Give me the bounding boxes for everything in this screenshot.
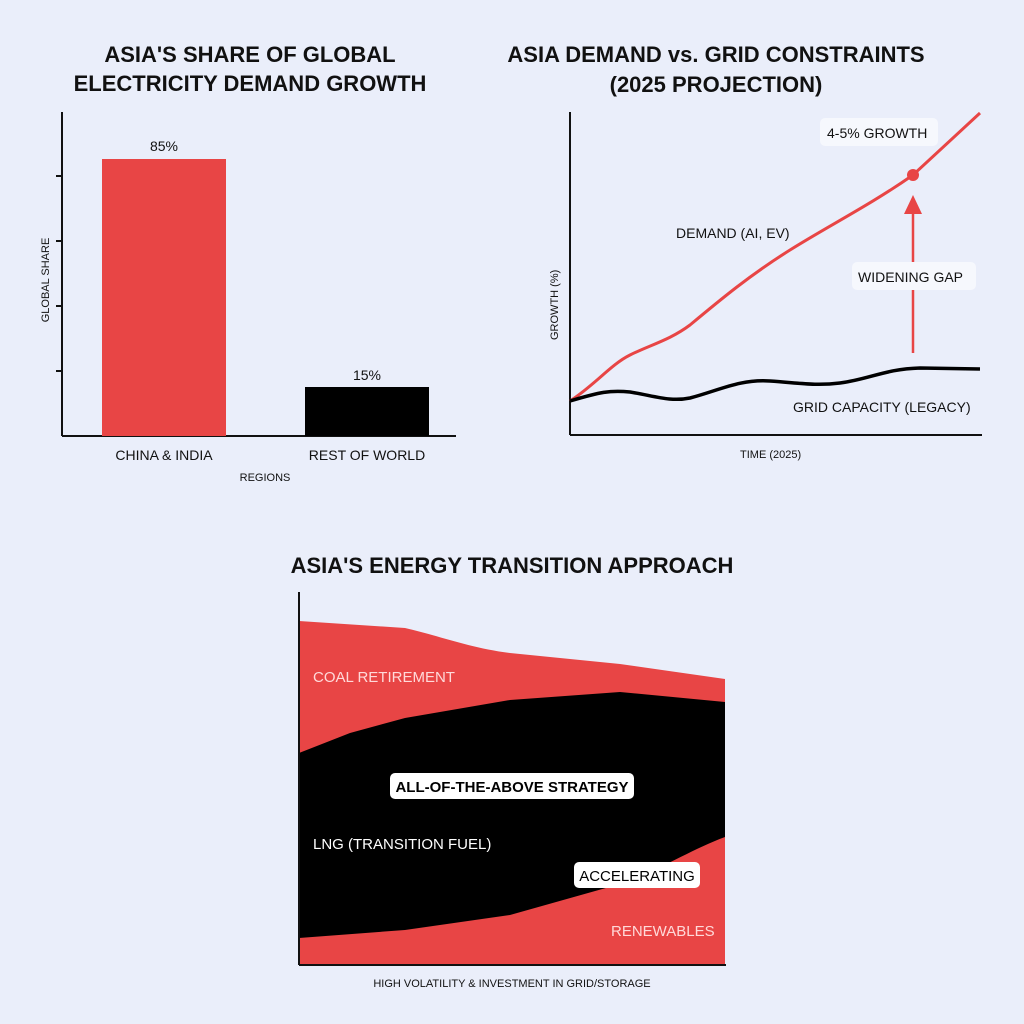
title: bottom chart: ASIA'S ENERGY TRANSITION APPROACH (291, 553, 733, 578)
line chart: demand vs grid: DEMAND (AI, EV) (676, 225, 790, 241)
area chart: transition: COAL RETIREMENT (313, 669, 455, 686)
title: left chart: ELECTRICITY DEMAND GROWTH (74, 71, 426, 96)
bar chart: demand share: CHINA & INDIA (115, 447, 213, 463)
title: right chart: ASIA DEMAND vs. GRID CONSTRAINTS (507, 42, 925, 67)
line chart: demand vs grid: WIDENING GAP (858, 269, 963, 285)
line chart: demand vs grid: GROWTH (%) (549, 270, 561, 340)
line chart: demand vs grid: TIME (2025) (740, 449, 801, 461)
bar chart: demand share: 85% (150, 138, 178, 154)
area chart: transition: HIGH VOLATILITY & INVESTMENT IN GRID/STORAGE (373, 978, 651, 990)
area chart: transition: ALL-OF-THE-ABOVE STRATEGY (395, 779, 629, 796)
title: right chart: (2025 PROJECTION) (610, 72, 822, 97)
area chart: transition: LNG (TRANSITION FUEL) (313, 836, 491, 853)
title: left chart (74, 42, 426, 96)
bar chart: demand share: REST OF WORLD (309, 447, 425, 463)
title: right chart (507, 42, 925, 97)
line chart: demand vs grid (549, 112, 982, 461)
bar chart: demand share: GLOBAL SHARE (40, 238, 52, 322)
title: left chart: ASIA'S SHARE OF GLOBAL (104, 42, 396, 67)
bar chart: demand share (40, 112, 456, 484)
bar chart: demand share: REGIONS (240, 472, 290, 484)
bar chart: demand share: 15% (353, 367, 381, 383)
area chart: transition (299, 592, 726, 990)
area chart: transition: ACCELERATING (579, 868, 695, 885)
area chart: transition: RENEWABLES (611, 923, 715, 940)
line chart: demand vs grid: GRID CAPACITY (LEGACY) (793, 399, 971, 415)
line chart: demand vs grid: 4-5% GROWTH (827, 125, 927, 141)
